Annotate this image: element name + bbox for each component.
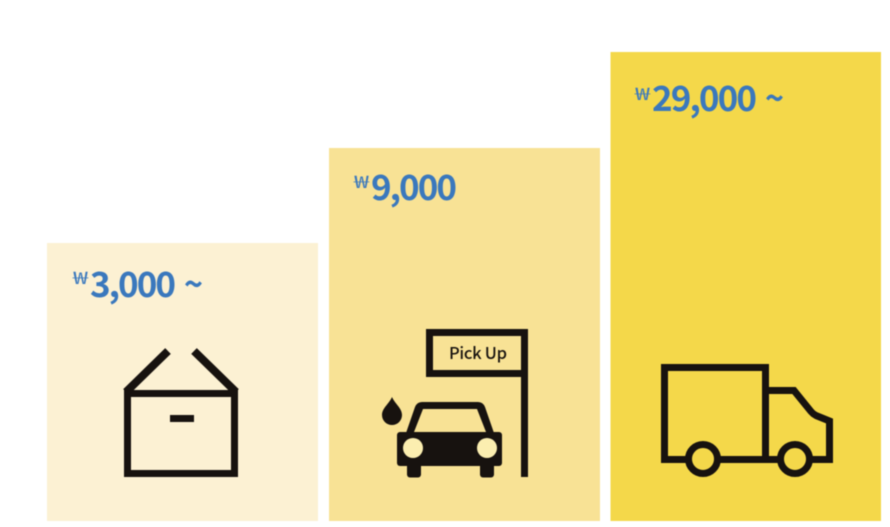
panel: pick up price bbox=[329, 148, 600, 521]
icon: pick up sign bbox=[430, 329, 528, 477]
icon: delivery truck bbox=[664, 368, 830, 474]
panel: truck delivery price bbox=[610, 52, 881, 521]
icon: open box bbox=[126, 351, 236, 474]
price: 29,000 won: 29,000 bbox=[652, 71, 757, 122]
price: 29,000 won: ~ bbox=[765, 71, 784, 122]
icon: pick up sign: Pick Up bbox=[449, 340, 507, 364]
price: 3,000 won bbox=[71, 257, 203, 308]
price: 3,000 won: ~ bbox=[184, 257, 203, 308]
price: 9,000 won: 9,000 bbox=[371, 160, 457, 211]
panel: parcel box price bbox=[47, 243, 318, 521]
price: 9,000 won: ₩ bbox=[352, 168, 370, 193]
price: 29,000 won bbox=[633, 71, 784, 122]
price: 3,000 won: ₩ bbox=[71, 264, 89, 289]
price: 3,000 won: 3,000 bbox=[90, 257, 176, 308]
price: 29,000 won: ₩ bbox=[633, 80, 651, 105]
icon: car with oil drop bbox=[382, 397, 502, 478]
